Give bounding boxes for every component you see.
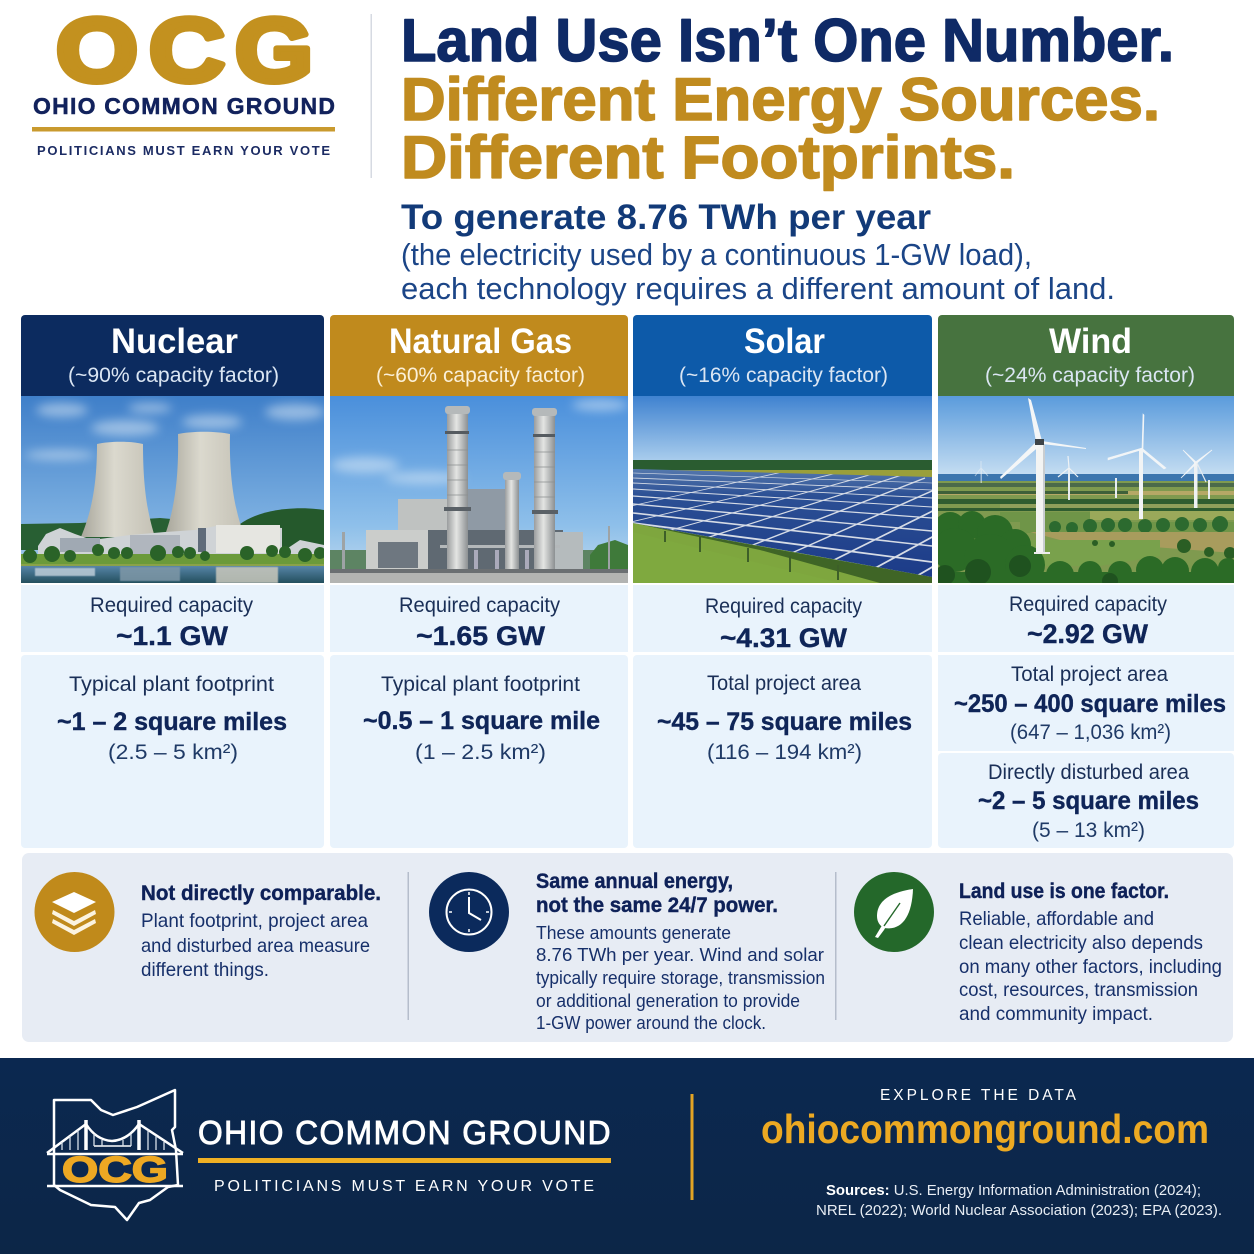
natural gas footprint xyxy=(330,655,628,848)
wind required capacity xyxy=(938,585,1234,652)
wind directly disturbed area xyxy=(938,753,1234,848)
logo: OCG Ohio Common Ground: O xyxy=(56,1,138,101)
solar project area: Total project area xyxy=(707,672,861,695)
solar project area: (116 – 194 km²) xyxy=(707,741,862,764)
note: not directly comparable: Not directly comparable. xyxy=(141,882,381,905)
sources xyxy=(816,1182,1222,1219)
subtitle: each technology requires a different amount of land. xyxy=(401,271,1115,306)
note: same annual energy: Same annual energy, xyxy=(536,870,733,893)
wind directly disturbed area: ~2 – 5 square miles xyxy=(978,787,1199,815)
natural gas plant photo illustration xyxy=(330,396,628,583)
wind required capacity: Required capacity xyxy=(1009,593,1167,616)
panel: notes xyxy=(22,853,1233,1042)
wind project area: ~250 – 400 square miles xyxy=(954,690,1226,718)
panel: nuclear xyxy=(21,315,326,848)
wind farm photo illustration xyxy=(933,396,1238,589)
nuclear footprint: (2.5 – 5 km²) xyxy=(108,741,238,764)
note: land use is one factor: Reliable, affordable and xyxy=(959,908,1154,930)
icon: leaf xyxy=(854,872,934,952)
note: same annual energy: typically require storage, transmission xyxy=(536,968,825,988)
note: land use is one factor: clean electricity also depends xyxy=(959,932,1203,954)
solar project area xyxy=(633,655,932,848)
solar header xyxy=(633,315,932,396)
note: same annual energy: 8.76 TWh per year. Wind and solar xyxy=(536,945,824,965)
nuclear footprint: Typical plant footprint xyxy=(69,673,274,696)
natural gas footprint: Typical plant footprint xyxy=(381,673,580,696)
title: Different Energy Sources. xyxy=(401,66,1160,133)
logo: OCG Ohio Common Ground: G xyxy=(235,1,313,101)
nuclear header: (~90% capacity factor) xyxy=(68,364,279,387)
note: not directly comparable: different things. xyxy=(141,959,269,981)
note: same annual energy: These amounts generate xyxy=(536,923,731,943)
title: Land Use Isn’t One Number. xyxy=(401,7,1174,74)
natural gas footprint: ~0.5 – 1 square mile xyxy=(363,707,600,735)
note: land use is one factor: Land use is one factor. xyxy=(959,880,1169,903)
note: same annual energy: or additional generation to provide xyxy=(536,991,800,1011)
note: land use is one factor: on many other factors, including xyxy=(959,956,1222,978)
logo: OCG Ohio Common Ground: POLITICIANS MUST EARN YOUR VOTE xyxy=(37,143,330,158)
note: not directly comparable: Plant footprint, project area xyxy=(141,910,368,932)
panel: natural gas xyxy=(330,315,628,848)
logo: OCG Ohio Common Ground: OHIO COMMON GROUND xyxy=(33,93,335,119)
logo: OCG Ohio Common Ground: C xyxy=(149,1,225,101)
nuclear required capacity xyxy=(21,585,324,652)
natural gas required capacity xyxy=(330,585,628,652)
note: not directly comparable xyxy=(141,882,381,981)
nuclear header: Nuclear xyxy=(111,322,238,361)
wind required capacity: ~2.92 GW xyxy=(1027,619,1149,649)
note: land use is one factor: and community impact. xyxy=(959,1003,1153,1025)
solar header: Solar xyxy=(744,322,825,361)
footer wordmark xyxy=(198,1114,612,1195)
footer wordmark: OHIO COMMON GROUND xyxy=(198,1114,612,1151)
nuclear required capacity: ~1.1 GW xyxy=(116,621,229,651)
natural gas header: Natural Gas xyxy=(389,322,572,361)
sources: Sources: U.S. Energy Information Administration (2024); xyxy=(826,1182,1201,1199)
solar required capacity: ~4.31 GW xyxy=(720,623,848,653)
solar project area: ~45 – 75 square miles xyxy=(657,708,912,736)
note: land use is one factor xyxy=(959,880,1222,1025)
panel: wind xyxy=(933,315,1238,848)
note: same annual energy: not the same 24/7 power. xyxy=(536,894,778,917)
icon: layers xyxy=(34,872,114,952)
footer xyxy=(0,1058,1254,1254)
natural gas required capacity: ~1.65 GW xyxy=(416,621,546,651)
explore the data call to action: ohiocommonground.com xyxy=(761,1106,1209,1152)
explore the data call to action xyxy=(761,1087,1209,1152)
footer logo: Ohio outline with bridge: OCG xyxy=(62,1149,168,1190)
title xyxy=(401,7,1174,191)
solar farm photo illustration xyxy=(633,396,932,583)
nuclear header xyxy=(21,315,324,396)
note: same annual energy xyxy=(536,870,825,1033)
wind header: Wind xyxy=(1049,322,1132,361)
solar required capacity: Required capacity xyxy=(705,595,862,618)
subtitle xyxy=(401,198,1115,306)
nuclear footprint: ~1 – 2 square miles xyxy=(57,708,287,736)
panel: solar xyxy=(633,315,932,848)
natural gas header: (~60% capacity factor) xyxy=(376,364,585,387)
sources: NREL (2022); World Nuclear Association (2023); EPA (2023). xyxy=(816,1202,1222,1219)
natural gas header xyxy=(330,315,628,396)
natural gas required capacity: Required capacity xyxy=(399,594,560,617)
wind project area: (647 – 1,036 km²) xyxy=(1010,721,1171,744)
nuclear footprint xyxy=(21,655,324,848)
note: not directly comparable: and disturbed area measure xyxy=(141,935,370,957)
wind project area: Total project area xyxy=(1011,663,1168,686)
wind header: (~24% capacity factor) xyxy=(985,364,1195,387)
subtitle: (the electricity used by a continuous 1-GW load), xyxy=(401,237,1032,272)
solar header: (~16% capacity factor) xyxy=(679,364,888,387)
note: land use is one factor: cost, resources, transmission xyxy=(959,979,1198,1001)
footer logo: Ohio outline with bridge xyxy=(47,1090,183,1220)
note: same annual energy: 1-GW power around the clock. xyxy=(536,1013,766,1033)
wind directly disturbed area: Directly disturbed area xyxy=(988,761,1189,784)
nuclear power plant photo illustration xyxy=(21,396,326,583)
wind project area xyxy=(938,655,1234,751)
wind directly disturbed area: (5 – 13 km²) xyxy=(1032,819,1145,842)
logo: OCG Ohio Common Ground xyxy=(32,1,335,158)
icon: clock xyxy=(429,872,509,952)
wind header xyxy=(938,315,1234,396)
solar required capacity xyxy=(633,585,932,653)
subtitle: To generate 8.76 TWh per year xyxy=(401,198,931,237)
explore the data call to action: EXPLORE THE DATA xyxy=(880,1087,1077,1104)
natural gas footprint: (1 – 2.5 km²) xyxy=(415,741,546,764)
footer wordmark: POLITICIANS MUST EARN YOUR VOTE xyxy=(214,1178,594,1195)
title: Different Footprints. xyxy=(401,124,1015,191)
nuclear required capacity: Required capacity xyxy=(90,594,253,617)
